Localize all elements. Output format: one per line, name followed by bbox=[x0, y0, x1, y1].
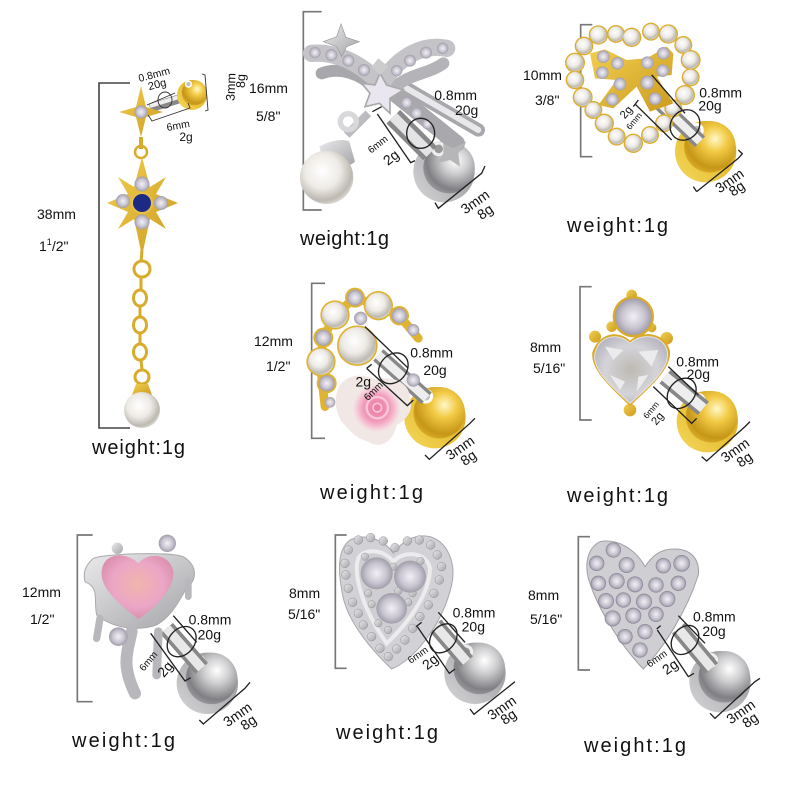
weight label: weight:1g bbox=[566, 215, 668, 237]
dimension labels bbox=[618, 85, 748, 199]
text: 5/16 inch: 5/16" bbox=[288, 606, 320, 622]
panel: clear heart gold prong piece bbox=[530, 287, 755, 507]
chain bbox=[134, 250, 150, 384]
dimension lines bbox=[147, 74, 208, 121]
height bracket 38mm bbox=[99, 83, 130, 428]
artwork and dimensions bbox=[565, 23, 748, 199]
text: 8mm: 8mm bbox=[289, 585, 320, 601]
weight label: weight:1g bbox=[91, 437, 185, 459]
text: 12mm: 12mm bbox=[254, 333, 293, 349]
dimension labels: 20g bbox=[702, 623, 726, 639]
text: 8mm: 8mm bbox=[528, 587, 559, 603]
dimension labels: 0.8mm bbox=[410, 345, 453, 361]
silver heart body bbox=[339, 536, 453, 669]
dimension labels: 0.8mm bbox=[453, 604, 495, 620]
dimension labels bbox=[645, 609, 761, 731]
text: 12mm: 12mm bbox=[22, 584, 61, 600]
text: 10mm: 10mm bbox=[523, 67, 562, 83]
text: 5/8 inch: 5/8" bbox=[256, 108, 280, 124]
dimension labels: 3mm bbox=[224, 73, 238, 101]
dimension labels: 2g bbox=[618, 104, 635, 121]
dimension labels: 6mm bbox=[645, 648, 670, 670]
dimension labels bbox=[406, 604, 519, 728]
text: inches: 1 bbox=[47, 237, 52, 247]
text: 8mm: 8mm bbox=[530, 339, 561, 355]
cross bow bands bbox=[312, 47, 478, 143]
small stones bbox=[309, 43, 448, 129]
panel: pave silver heart piece bbox=[528, 537, 761, 757]
text: 38mm length: 38mm bbox=[37, 206, 76, 222]
weight label: weight:1g bbox=[583, 735, 686, 757]
text: 16mm: 16mm bbox=[249, 80, 288, 96]
dimension labels: 20g bbox=[687, 366, 710, 382]
inner beads bbox=[361, 553, 424, 634]
dimension labels: 2g bbox=[179, 130, 193, 144]
text: 5/16 inch: 5/16" bbox=[530, 611, 562, 627]
pink heart stone bbox=[102, 555, 173, 619]
dimension labels: 2g bbox=[154, 658, 176, 680]
dimension labels: 3mm bbox=[723, 696, 758, 727]
artwork and dimensions bbox=[300, 12, 496, 223]
dimension labels: 6mm bbox=[138, 650, 160, 674]
icon: stars bbox=[323, 24, 467, 167]
weight label: weight:1g bbox=[299, 228, 389, 250]
panel: silver cross bow piece bbox=[249, 12, 496, 250]
bar and gold ball bbox=[660, 103, 736, 182]
dimension labels: 2g bbox=[380, 146, 402, 168]
dimension labels: 6mm bbox=[366, 134, 390, 156]
text: 1/2 inch: 1/2" bbox=[266, 358, 290, 374]
dimension labels: 6mm bbox=[166, 118, 191, 134]
panel: gold pearl heart bow piece bbox=[523, 23, 748, 237]
heart facets bbox=[605, 347, 658, 392]
dimension labels bbox=[356, 345, 479, 469]
icon: small gold star with stone bbox=[119, 86, 163, 158]
panel: gold pearl crescent rose piece bbox=[254, 283, 479, 504]
weight label: weight:1g bbox=[71, 730, 175, 752]
panel: long star chain piece bbox=[37, 65, 248, 459]
dimension labels: 3mm bbox=[712, 165, 747, 196]
dimension lines bbox=[151, 616, 250, 724]
dimension labels bbox=[641, 354, 755, 470]
artwork and dimensions bbox=[77, 535, 259, 733]
icon: pearl drop bbox=[124, 384, 160, 428]
dimension labels: 0.8mm bbox=[693, 609, 736, 625]
gold bow with stones bbox=[590, 47, 673, 112]
dimension labels bbox=[137, 65, 248, 144]
dimension lines bbox=[365, 327, 475, 459]
bar and silver ball bbox=[167, 628, 238, 714]
dimension labels: 8g bbox=[739, 709, 761, 731]
panel: beaded silver heart piece bbox=[288, 533, 519, 744]
molten silver setting bbox=[84, 535, 194, 693]
dimension labels: 20g bbox=[147, 77, 168, 93]
dimension labels: 2g bbox=[659, 656, 681, 678]
dimension labels: 0.8mm bbox=[676, 354, 719, 370]
bar and silver ball bbox=[678, 628, 751, 712]
dimension lines bbox=[657, 616, 760, 718]
artwork and dimensions bbox=[578, 537, 761, 731]
dimension lines bbox=[633, 75, 743, 192]
bar and gold ball bbox=[378, 355, 466, 448]
weight label: weight:1g bbox=[319, 482, 423, 504]
dimension labels: 8g bbox=[733, 448, 755, 470]
dimension labels: 8g bbox=[726, 177, 748, 199]
dimension labels: 8g bbox=[474, 201, 496, 223]
dimension labels: 20g bbox=[455, 102, 478, 118]
artwork and dimensions bbox=[335, 533, 519, 728]
bar and silver ball bbox=[435, 625, 506, 704]
dimension labels: 2g bbox=[419, 651, 441, 673]
dimension labels: 3mm bbox=[220, 699, 255, 730]
dimension labels: 20g bbox=[423, 362, 447, 378]
heart outline of pearls bbox=[565, 23, 701, 153]
text: inches: /2" bbox=[52, 238, 68, 254]
three round stones bbox=[361, 557, 426, 624]
bar and silver ball bbox=[393, 117, 480, 207]
dimension labels: 8g bbox=[457, 447, 479, 469]
dimension labels: 2g bbox=[649, 410, 667, 428]
icon: pearl drop bbox=[300, 113, 368, 204]
stones and pearls bbox=[306, 288, 420, 408]
gold prongs bbox=[589, 290, 673, 416]
dimension lines bbox=[372, 107, 485, 208]
dimension labels: 20g bbox=[198, 626, 221, 642]
icon: eight-point star with blue stone bbox=[107, 157, 178, 256]
dimension labels: 6mm bbox=[641, 399, 661, 421]
dimension labels: 0.8mm bbox=[137, 65, 172, 85]
pave stones bbox=[589, 543, 690, 657]
bar and gold ball bbox=[150, 79, 208, 111]
bead rim bbox=[341, 533, 446, 661]
artwork and dimensions bbox=[580, 287, 755, 470]
dimension labels: 6mm bbox=[624, 110, 644, 132]
dimension labels: 0.8mm bbox=[699, 85, 742, 101]
dimension labels bbox=[366, 87, 496, 223]
dimension labels: 8g bbox=[234, 74, 248, 88]
dimension labels: 3mm bbox=[484, 692, 519, 723]
text: 3/8 inch: 3/8" bbox=[535, 92, 559, 108]
dimension labels: 8g bbox=[237, 711, 259, 733]
dimension labels: 20g bbox=[462, 619, 485, 635]
dimension labels: 20g bbox=[698, 98, 722, 114]
gold crescent setting bbox=[320, 298, 418, 407]
text: 1/2 inch: 1/2" bbox=[30, 611, 54, 627]
dimension lines bbox=[416, 612, 515, 714]
clear heart stone bbox=[595, 337, 668, 403]
dimension labels: 6mm bbox=[362, 380, 386, 403]
text: inches: 1 bbox=[39, 238, 47, 254]
dimension labels: 2g bbox=[356, 374, 371, 390]
weight label: weight:1g bbox=[566, 485, 668, 507]
rose flower bbox=[336, 376, 411, 445]
dimension labels: 0.8mm bbox=[434, 87, 477, 103]
dimension labels: 8g bbox=[497, 706, 519, 728]
artwork and dimensions bbox=[306, 283, 479, 469]
inner frame bbox=[357, 551, 430, 643]
dimension labels: 3mm bbox=[443, 432, 477, 463]
weight label: weight:1g bbox=[335, 722, 438, 744]
text: 5/16 inch: 5/16" bbox=[533, 360, 565, 376]
bar and gold ball bbox=[665, 377, 738, 452]
dimension labels: 3mm bbox=[718, 435, 752, 465]
round top stone bbox=[615, 298, 652, 335]
dimension labels: 6mm bbox=[406, 645, 431, 667]
dimension labels: 0.8mm bbox=[189, 611, 231, 627]
dimension labels: 3mm bbox=[458, 186, 492, 217]
panel: pink heart molten silver piece bbox=[22, 535, 259, 752]
dimension lines bbox=[653, 367, 750, 461]
dimension labels bbox=[138, 611, 259, 733]
silver heart body bbox=[587, 541, 699, 669]
